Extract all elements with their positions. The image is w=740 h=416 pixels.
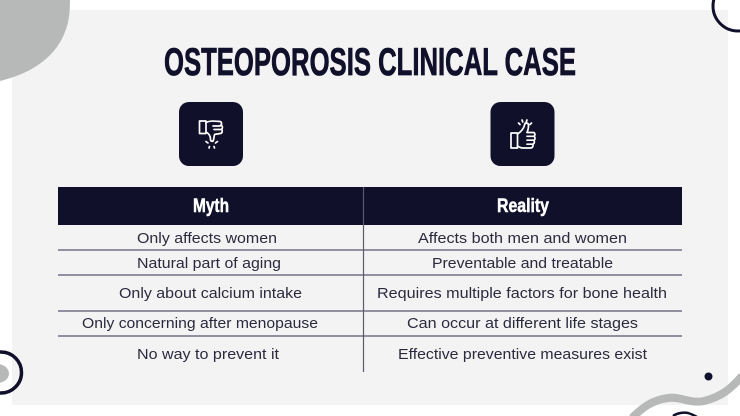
row 3 bbox=[119, 285, 667, 302]
decoration: dark shape bottom right bbox=[673, 413, 697, 416]
row 1 bbox=[137, 230, 627, 247]
decoration: ring bottom left bbox=[0, 352, 22, 393]
row 2: Natural part of aging bbox=[137, 255, 281, 272]
row 2 bbox=[137, 255, 613, 272]
table bbox=[58, 187, 682, 372]
table header: Reality bbox=[364, 187, 682, 225]
row 4 bbox=[82, 315, 638, 332]
row rules bbox=[58, 187, 682, 372]
decoration: grey blob top left bbox=[0, 0, 70, 81]
table header: Myth: Myth bbox=[193, 196, 229, 217]
row 2: Preventable and treatable bbox=[432, 255, 613, 272]
row 5: Effective preventive measures exist bbox=[398, 346, 648, 363]
row 5: No way to prevent it bbox=[137, 346, 280, 363]
row 1: Affects both men and women bbox=[418, 230, 627, 247]
decoration: ring top right bbox=[713, 0, 740, 31]
decoration: wave bottom right bbox=[632, 376, 740, 416]
row 3: Requires multiple factors for bone health bbox=[377, 285, 667, 302]
row 4: Only concerning after menopause bbox=[82, 315, 318, 332]
row 5 bbox=[137, 346, 648, 363]
table header: Myth bbox=[58, 187, 363, 225]
table header: Reality: Reality bbox=[497, 196, 549, 217]
decoration: dot bbox=[704, 372, 712, 380]
row 4: Can occur at different life stages bbox=[407, 315, 638, 332]
row 3: Only about calcium intake bbox=[119, 285, 302, 302]
icon: thumbs down bbox=[179, 102, 243, 166]
row 1: Only affects women bbox=[137, 230, 277, 247]
icon: thumbs up bbox=[490, 102, 554, 166]
